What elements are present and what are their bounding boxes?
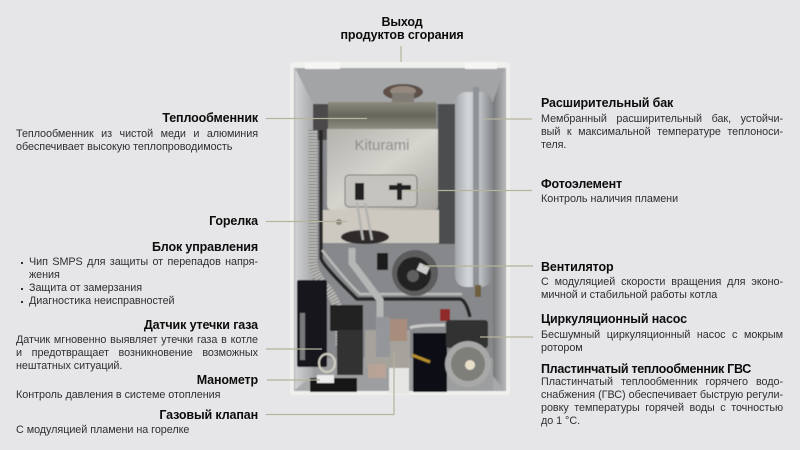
text block: control unit — [21, 240, 258, 307]
text block: plate heat exchanger: Пластинчатый теплообменник горячего водо- — [541, 376, 783, 388]
text block: control unit: Защита от замерзания — [29, 282, 142, 294]
text block: gas leak sensor: Датчик утечки газа — [144, 318, 258, 332]
heading: flue gas outlet: продуктов сгорания — [340, 28, 464, 42]
heading: flue gas outlet: Выход — [381, 15, 423, 29]
control unit — [297, 280, 363, 375]
heading: flue gas outlet — [340, 15, 464, 42]
text block: heat exchanger: Теплообменник — [162, 111, 258, 125]
text block: plate heat exchanger: ровку температуры горячей воды с точностью — [541, 402, 783, 414]
text block: heat exchanger: обеспечивает высокую теплопроводимость — [16, 141, 232, 153]
corrugated pipe — [313, 130, 340, 345]
text block: gas leak sensor: нештатных ситуаций. — [16, 360, 122, 372]
boiler casing — [290, 62, 510, 395]
text block: fan: Вентилятор — [541, 260, 614, 274]
text block: pressure gauge — [16, 373, 258, 401]
text block: fan — [541, 260, 783, 301]
text block: plate heat exchanger: Пластинчатый теплообменник ГВС — [541, 362, 751, 376]
fan — [377, 250, 438, 296]
text block: gas leak sensor: и предотвращает возникновение возможных — [16, 347, 258, 359]
manometer — [310, 354, 357, 392]
text block: fan: С модуляцией скорости вращения для эконо- — [541, 276, 783, 288]
text block: heat exchanger — [16, 111, 258, 153]
text block: photocell: Контроль наличия пламени — [541, 193, 678, 205]
text block: control unit: жения — [29, 269, 60, 281]
text block: photocell: Фотоэлемент — [541, 177, 622, 191]
text block: expansion tank: Расширительный бак — [541, 96, 673, 110]
heading: burner: Горелка — [209, 214, 258, 228]
text block: plate heat exchanger: снабжения (ГВС) обеспечивает быструю регули- — [541, 389, 783, 401]
text block: expansion tank — [541, 96, 783, 151]
text block: expansion tank: теля. — [541, 139, 566, 151]
text block: fan: мичной и стабильной работы котла — [541, 289, 717, 301]
text block: heat exchanger: Теплообменник из чистой меди и алюминия — [16, 128, 258, 140]
text block: circulation pump — [541, 312, 783, 354]
text block: gas valve: С модуляцией пламени на горелке — [16, 424, 189, 436]
text block: circulation pump: Бесшумный циркуляционный насос с мокрым — [541, 329, 783, 341]
text block: control unit: Диагностика неисправностей — [29, 295, 175, 307]
text block: gas leak sensor — [16, 318, 258, 372]
text block: pressure gauge: Контроль давления в системе отопления — [16, 389, 220, 401]
heat exchanger: Kiturami — [354, 137, 410, 154]
text block: photocell — [541, 177, 678, 205]
gas valve — [365, 317, 447, 394]
flue outlet — [383, 84, 423, 103]
text block: plate heat exchanger: до 1 °C. — [541, 415, 580, 427]
text block: control unit: Чип SMPS для защиты от перепадов напря- — [29, 256, 258, 268]
text block: expansion tank: вый к максимальной температуре теплоноси- — [541, 126, 783, 138]
heat exchanger — [327, 102, 438, 210]
text block: gas leak sensor: Датчик мгновенно выявляет утечки газа в котле — [16, 334, 258, 346]
text block: control unit: Блок управления — [152, 240, 258, 254]
expansion tank — [455, 87, 492, 297]
text block: plate heat exchanger — [541, 362, 783, 427]
text block: circulation pump: ротором — [541, 342, 583, 354]
circulation pump — [410, 309, 491, 387]
leader lines — [266, 46, 533, 414]
text block: circulation pump: Циркуляционный насос — [541, 312, 687, 326]
text block: pressure gauge: Манометр — [197, 373, 258, 387]
text block: gas valve: Газовый клапан — [159, 408, 258, 422]
heating pipes — [321, 130, 470, 317]
text block: gas valve — [16, 408, 258, 436]
text block: expansion tank: Мембранный расширительный бак, устойчи- — [541, 113, 783, 125]
burner — [322, 203, 439, 244]
